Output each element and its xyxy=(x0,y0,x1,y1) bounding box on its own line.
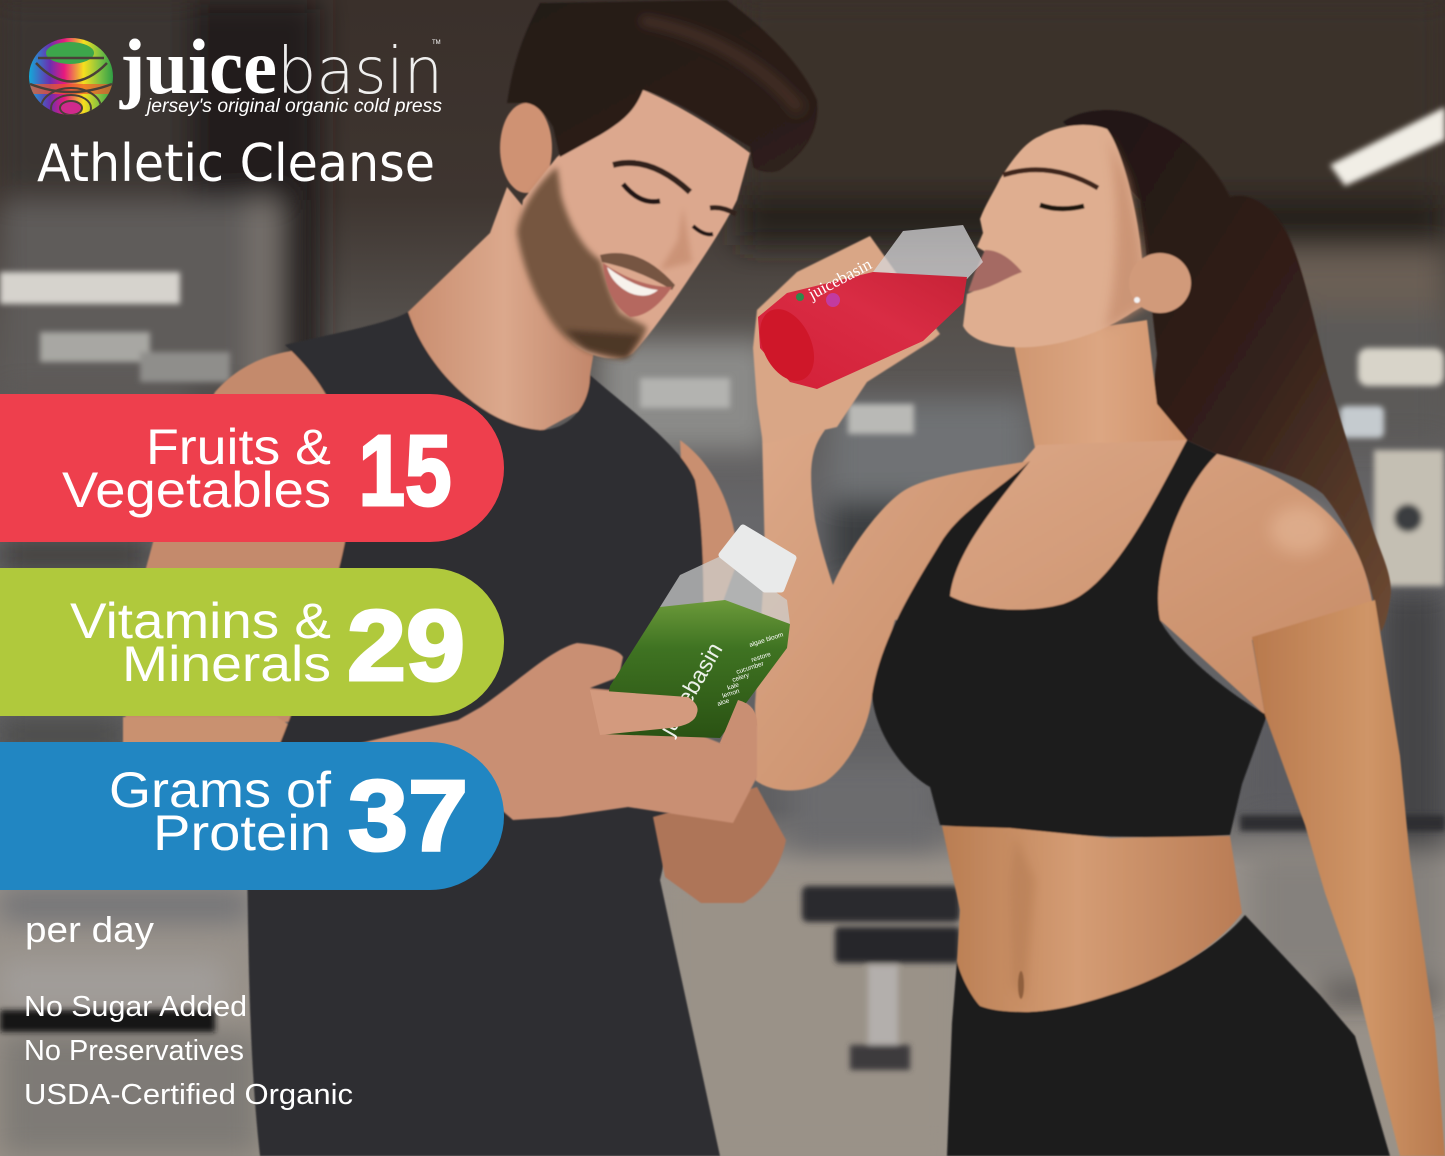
bottle label text: juicebasin xyxy=(804,254,875,304)
bottle ingredient list: celery xyxy=(731,672,751,684)
bottle logo dot xyxy=(826,293,840,307)
woman: right arm xyxy=(1252,600,1445,1156)
logo wordmark xyxy=(119,23,443,117)
man: eyes and brows xyxy=(613,163,736,234)
woman: shoulders and chest skin xyxy=(895,440,1375,715)
woman: face xyxy=(963,125,1147,347)
man: hand xyxy=(352,643,757,823)
woman: raised forearm and upper arm xyxy=(755,430,1030,790)
woman: ear xyxy=(1129,253,1191,313)
man: beard xyxy=(517,167,647,359)
label: Vitamins & xyxy=(70,593,331,649)
claims list: No Preservatives xyxy=(24,1035,244,1067)
woman: navel xyxy=(1018,971,1024,999)
man: hand and green bottle xyxy=(352,528,793,903)
woman: midriff xyxy=(942,826,1242,1012)
photo: woman xyxy=(753,110,1445,1156)
man: nose shadow xyxy=(660,207,692,270)
logo wordmark: basin xyxy=(277,35,443,109)
pill: vitamins and minerals: Minerals xyxy=(122,636,331,692)
woman: cheek shadow xyxy=(1105,135,1147,330)
woman: hand holding bottle xyxy=(753,236,940,444)
man: pinky finger xyxy=(720,700,757,745)
green liquid xyxy=(600,600,790,738)
number: 15 xyxy=(358,415,452,527)
man: hair xyxy=(507,0,818,172)
pill: fruits and vegetables xyxy=(0,394,504,542)
man: tank top xyxy=(245,312,720,1156)
pill: vitamins and minerals xyxy=(0,568,504,716)
woman: sports bra xyxy=(872,440,1267,837)
number: 37 xyxy=(348,760,468,872)
man: crossing forearm xyxy=(123,717,320,745)
man: moustache xyxy=(600,253,675,290)
bottle ingredient list: algae bloom xyxy=(748,631,784,649)
claims list: No Sugar Added xyxy=(24,991,247,1023)
claims list xyxy=(24,991,353,1111)
man: smile xyxy=(603,263,672,317)
label: Grams of xyxy=(109,762,331,818)
man: face xyxy=(517,90,750,358)
woman: earring xyxy=(1134,297,1140,303)
photo: man xyxy=(123,0,818,1156)
per day note: per day xyxy=(25,909,154,950)
bottle ingredient list: cucumber xyxy=(735,660,766,676)
number: 29 xyxy=(347,590,465,702)
woman: neck xyxy=(1013,320,1187,560)
bottle cap xyxy=(722,528,793,589)
pill: grams of protein: Protein xyxy=(153,805,331,861)
bottle ingredient list: kale xyxy=(726,681,740,692)
woman: hair xyxy=(1063,110,1391,632)
logo wordmark: juice xyxy=(119,23,277,110)
organic seal xyxy=(796,293,804,301)
woman: shoulder highlight xyxy=(1270,506,1330,554)
woman: abs shading xyxy=(1010,835,1035,1000)
bottle: red juice xyxy=(749,225,983,390)
title: Athletic Cleanse xyxy=(37,134,435,194)
bottle ingredient list: restore xyxy=(750,651,772,664)
woman: lips xyxy=(968,250,1022,292)
man: far arm xyxy=(680,440,738,630)
bottle base xyxy=(749,300,825,390)
man: chin shadow xyxy=(565,330,640,358)
man: ear xyxy=(500,103,552,193)
bottle ingredient list: aloe xyxy=(716,697,731,708)
man: index finger xyxy=(590,690,698,735)
pill: grams of protein xyxy=(0,742,504,890)
man: upper arm and shoulder xyxy=(125,349,365,745)
label: Fruits & xyxy=(146,419,331,475)
claims list: USDA-Certified Organic xyxy=(24,1079,353,1111)
trademark: TM xyxy=(432,40,441,46)
pill: fruits and vegetables: Vegetables xyxy=(62,462,331,518)
bottle ingredient list xyxy=(716,631,784,708)
bottle ingredient list: lemon xyxy=(721,688,741,700)
clear bottle shoulder xyxy=(660,555,790,624)
logo tagline: jersey's original organic cold press xyxy=(144,96,442,117)
clear bottle neck xyxy=(873,225,983,279)
woman: leggings xyxy=(947,915,1390,1156)
red liquid xyxy=(758,272,967,389)
man: hair highlights xyxy=(640,20,800,110)
woman: eye and brow xyxy=(1003,170,1098,209)
logo icon: rainbow sphere xyxy=(29,38,113,115)
bottle wordmark: juicebasin xyxy=(653,638,727,740)
man: neck and chest xyxy=(408,187,600,432)
man: lower forearm xyxy=(653,787,786,903)
